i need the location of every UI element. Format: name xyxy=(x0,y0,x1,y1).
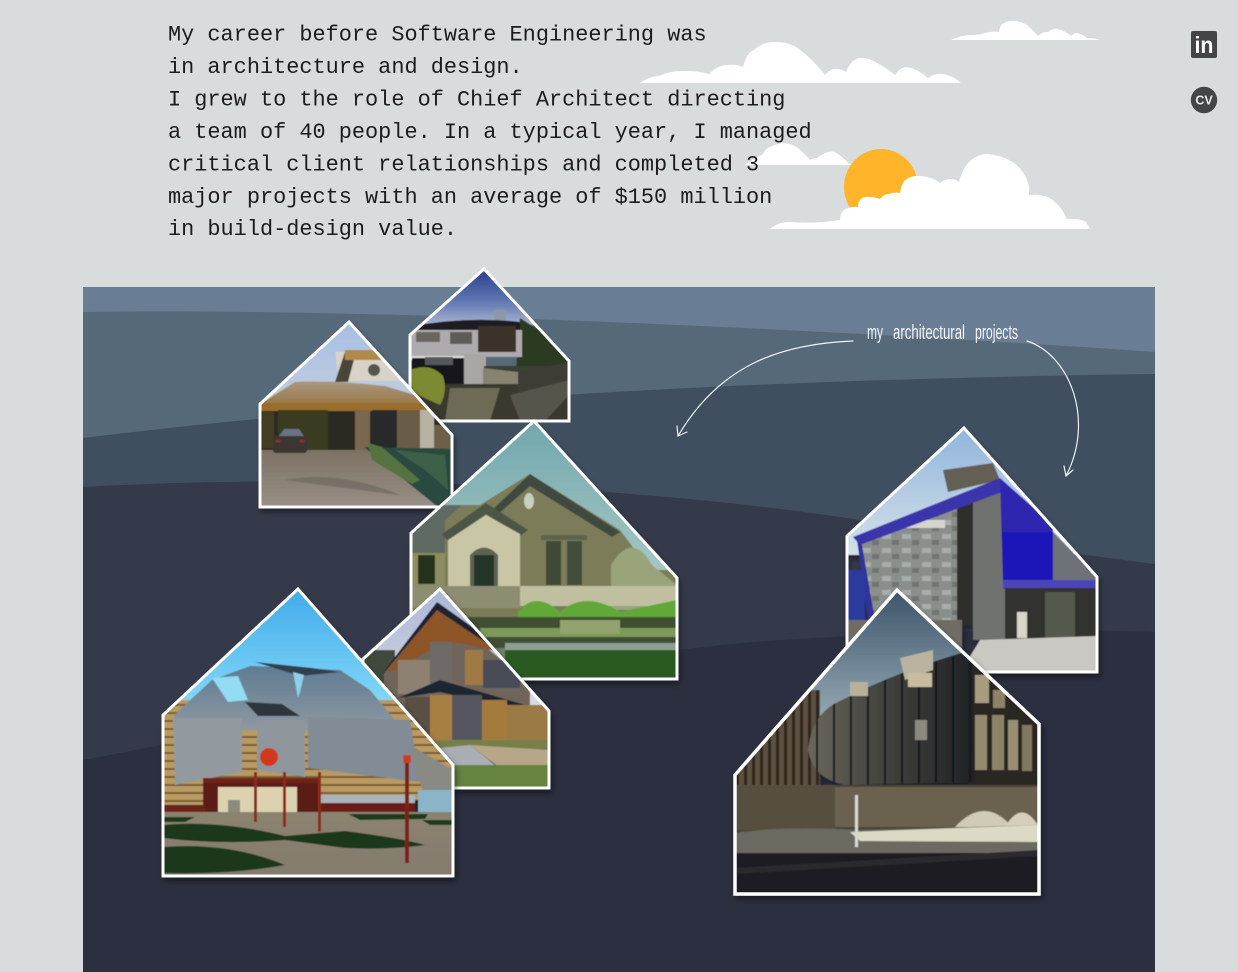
intro text block xyxy=(168,22,812,242)
intro text block: a team of 40 people. In a typical year, I managed xyxy=(168,120,812,145)
icon: cv: CV xyxy=(1195,94,1213,108)
house photo: stone house by water xyxy=(405,418,680,680)
cloud: top centre xyxy=(640,42,961,83)
cloud: top right xyxy=(951,21,1100,40)
intro text block: major projects with an average of $150 million xyxy=(168,185,772,210)
icon: linkedin: in xyxy=(1194,32,1214,58)
arrow: to left houses xyxy=(677,341,853,436)
intro text block: in build-design value. xyxy=(168,217,457,242)
annotation: my architectural projects: projects xyxy=(975,322,1018,344)
annotation: my architectural projects: architectural xyxy=(893,322,965,344)
intro text block: critical client relationships and completed 3 xyxy=(168,152,759,178)
icon: cv xyxy=(1191,87,1217,113)
house photo: blue glass building xyxy=(845,425,1100,672)
sun xyxy=(844,149,918,225)
house photo: dark barrel building xyxy=(732,586,1042,894)
house photo: timber house xyxy=(360,585,552,789)
intro text block: in architecture and design. xyxy=(168,55,523,80)
cloud: large front xyxy=(770,154,1090,229)
house photo: carport house xyxy=(255,318,455,510)
arrow: to right houses xyxy=(1027,341,1078,476)
panel: projects landscape xyxy=(83,287,1155,972)
house photo: metal canopy building xyxy=(160,585,456,877)
intro text block: I grew to the role of Chief Architect directing xyxy=(168,88,785,112)
cloud: behind sun xyxy=(745,143,854,165)
house photo: dark modern villa xyxy=(405,265,575,422)
intro text block: My career before Software Engineering was xyxy=(168,22,707,48)
annotation: my architectural projects: my xyxy=(867,322,883,344)
